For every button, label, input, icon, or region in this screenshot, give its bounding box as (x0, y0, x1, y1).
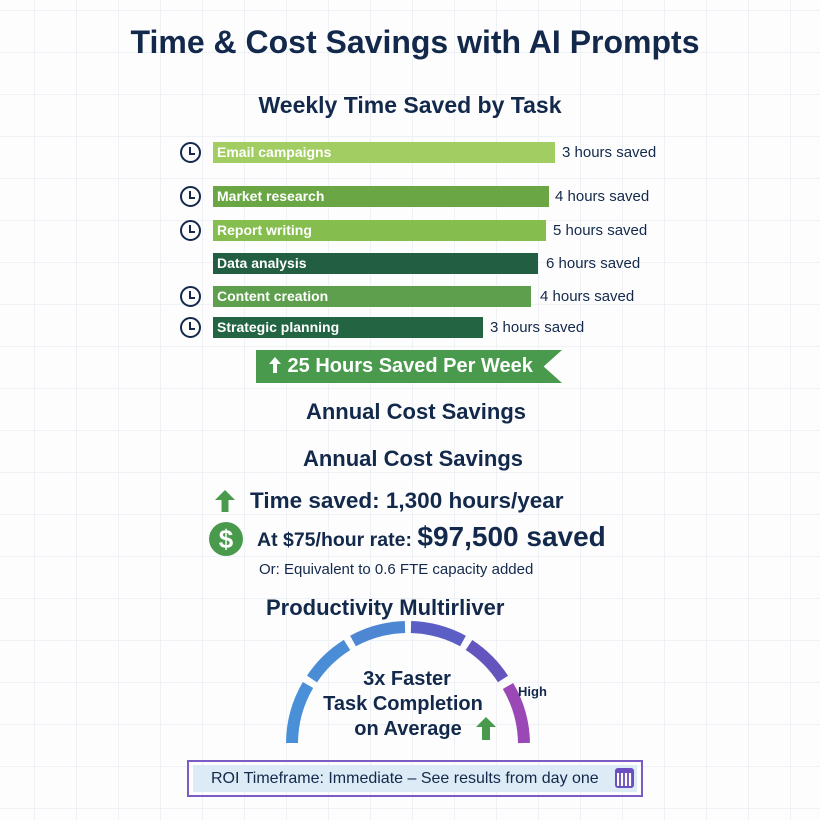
heading: productivity: Productivity Multirliver (266, 595, 504, 620)
title: Time & Cost Savings with AI Prompts (130, 24, 699, 60)
bar: email campaigns: Email campaigns (217, 144, 331, 160)
label: 4 hours content: 4 hours saved (540, 288, 634, 305)
bar: data analysis (213, 253, 538, 274)
icon: clock email (180, 142, 201, 163)
bar: market research: Market research (217, 188, 324, 204)
gauge text: on Average (354, 718, 462, 740)
label: high: High (518, 684, 547, 699)
bar: content creation (213, 286, 531, 307)
banner: 25 hours (256, 350, 562, 383)
icon: clock market (180, 186, 201, 207)
icon: calendar (615, 768, 634, 788)
bar: strategic planning: Strategic planning (217, 319, 339, 335)
gauge text: 3x Faster (363, 668, 451, 690)
label: 4 hours: 4 hours saved (555, 188, 649, 205)
gauge text: Task Completion (323, 693, 483, 715)
label: 6 hours: 6 hours saved (546, 255, 640, 272)
label: 5 hours: 5 hours saved (553, 222, 647, 239)
text: time saved: Time saved: 1,300 hours/year (250, 488, 564, 513)
callout: ROI timeframe: ROI Timeframe: Immediate – See results from day one (211, 770, 599, 787)
banner: 25 hours: 25 Hours Saved Per Week (288, 355, 533, 377)
gauge text (323, 668, 483, 740)
icon: up arrow green (215, 490, 235, 512)
bar: content creation: Content creation (217, 288, 328, 304)
bar: market research (213, 186, 549, 207)
bar: report writing: Report writing (217, 222, 312, 238)
bar: email campaigns (213, 142, 555, 163)
bar: report writing (213, 220, 546, 241)
gauge (286, 621, 547, 744)
label: 3 hours: 3 hours saved (562, 144, 656, 161)
bar: strategic planning (213, 317, 483, 338)
label: 3 hours strategic: 3 hours saved (490, 319, 584, 336)
heading: weekly time saved: Weekly Time Saved by Task (258, 92, 562, 118)
callout: ROI timeframe (187, 760, 643, 797)
icon: green arrow (476, 717, 496, 740)
bar: data analysis: Data analysis (217, 255, 306, 271)
icon: dollar (209, 522, 243, 556)
icon: clock strategic (180, 317, 201, 338)
heading: annual cost savings 2: Annual Cost Savings (303, 446, 523, 471)
text: rate savings: At $75/hour rate: $97,500 saved (257, 521, 606, 552)
text: FTE: Or: Equivalent to 0.6 FTE capacity added (259, 561, 533, 578)
icon: clock report (180, 220, 201, 241)
heading: annual cost savings 1: Annual Cost Savings (306, 399, 526, 424)
icon: clock content (180, 286, 201, 307)
icon: dollar: $ (219, 524, 233, 554)
